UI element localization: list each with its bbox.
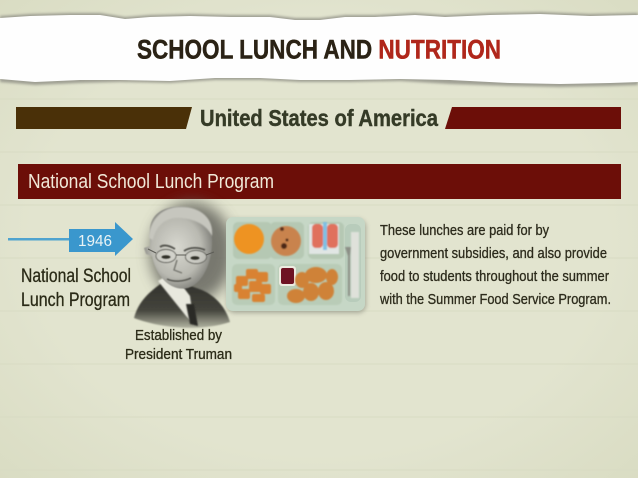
description text: food to students throughout the summer bbox=[380, 269, 609, 285]
title: SCHOOL LUNCH AND NUTRITION bbox=[137, 34, 501, 64]
chicken nuggets bbox=[287, 267, 338, 303]
portrait caption: President Truman bbox=[125, 347, 232, 363]
milk carton bbox=[309, 222, 339, 254]
orange bbox=[234, 224, 264, 254]
torn paper title banner bbox=[0, 12, 638, 87]
description text: These lunches are paid for by bbox=[380, 223, 550, 239]
description text: government subsidies, and also provide bbox=[380, 246, 607, 262]
utensils bbox=[345, 232, 359, 298]
portrait caption: Established by bbox=[135, 328, 223, 344]
left brown heading bar bbox=[16, 107, 192, 129]
timeline arrow with year bbox=[8, 222, 133, 256]
portrait: President Truman bbox=[134, 202, 234, 328]
program banner bbox=[18, 164, 621, 199]
timeline label: Lunch Program bbox=[21, 290, 130, 311]
right red heading bar bbox=[445, 107, 621, 129]
banner label: National School Lunch Program bbox=[28, 171, 274, 193]
timeline label: National School bbox=[21, 266, 131, 287]
lunch tray photo bbox=[226, 217, 366, 313]
cookies bbox=[271, 226, 301, 256]
chicken bites bbox=[234, 269, 271, 302]
description text: with the Summer Food Service Program. bbox=[379, 292, 611, 308]
section heading: United States of America: United States of America bbox=[200, 105, 438, 131]
dipping sauce bbox=[279, 266, 296, 286]
year: 1946 bbox=[78, 233, 112, 250]
